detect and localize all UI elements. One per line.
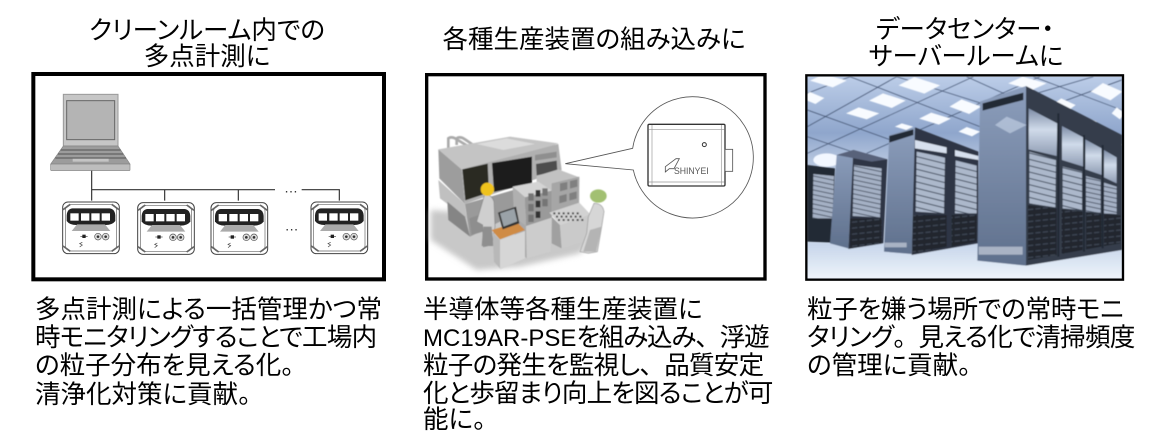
back wall glow [813, 153, 840, 167]
network lines [92, 171, 339, 233]
text block: clean room description: 多点計測による一括管理かつ常 [35, 296, 382, 324]
text block: data center description: タリング。見える化で清掃頻度 [807, 324, 1135, 352]
ceiling lights [810, 74, 847, 87]
network lines: … [284, 180, 298, 196]
server rack row: far left [807, 165, 835, 243]
text block: production equipment description: 化と歩留まり向上を図ることが可 [423, 380, 773, 408]
text block: production equipment description: MC19AR-PSEを組み込み、浮遊 [423, 324, 769, 352]
heading: data center: データセンター・ [876, 16, 1054, 44]
ceiling grid [807, 77, 1122, 157]
text block: clean room description: の粒子分布を見える化。 [35, 352, 294, 380]
worker: yellow helmet [477, 193, 495, 247]
text block: data center description: の管理に貢献。 [807, 352, 971, 380]
column: production equipment [423, 26, 773, 434]
column: data center [807, 16, 1135, 380]
server rack row: front [977, 86, 1026, 266]
floor shadow [431, 210, 593, 270]
icon: laptop [51, 94, 130, 171]
server rack row: middle [884, 127, 915, 254]
heading: clean room: 多点計測に [144, 43, 270, 71]
text block: production equipment description: 半導体等各種生産装置に [423, 296, 703, 324]
heading: data center [869, 16, 1063, 71]
text block: production equipment description: 粒子の発生を監視し、品質安定 [423, 352, 763, 380]
icon: sensor body: SHINYEI [674, 166, 709, 176]
server rack row: back [830, 150, 853, 248]
text block: clean room description: 清浄化対策に貢献。 [35, 381, 251, 409]
network lines: … [285, 217, 299, 233]
text block: clean room description [35, 296, 382, 409]
worker: green cap [580, 203, 604, 253]
floor [807, 243, 1122, 279]
icon: sensor body [648, 124, 733, 186]
text block: clean room description: 時モニタリングすることで工場内 [35, 324, 376, 352]
panel: server room photo [801, 74, 1125, 280]
text block: data center description [807, 296, 1135, 380]
text block: production equipment description [423, 296, 773, 434]
panel: network diagram [33, 74, 384, 279]
callout: sensor zoom [565, 97, 753, 218]
icon: monitor unit 4 [311, 202, 368, 254]
illustration: machine and workers [438, 137, 607, 269]
column: clean room [35, 17, 382, 409]
heading: clean room [89, 17, 325, 71]
heading: data center: サーバールームに [869, 43, 1063, 71]
icon: monitor unit 2 [138, 203, 194, 254]
icon: monitor unit 1 [63, 202, 119, 254]
text block: production equipment description: 能に。 [423, 406, 486, 434]
heading: clean room: クリーンルーム内での [89, 17, 325, 45]
text block: data center description: 粒子を嫌う場所での常時モニ [807, 296, 1124, 324]
console desk [492, 223, 525, 239]
icon: monitor unit 3 [211, 203, 268, 254]
heading: production equipment: 各種生産装置の組み込みに [442, 26, 746, 54]
panel: production equipment illustration [427, 75, 765, 279]
